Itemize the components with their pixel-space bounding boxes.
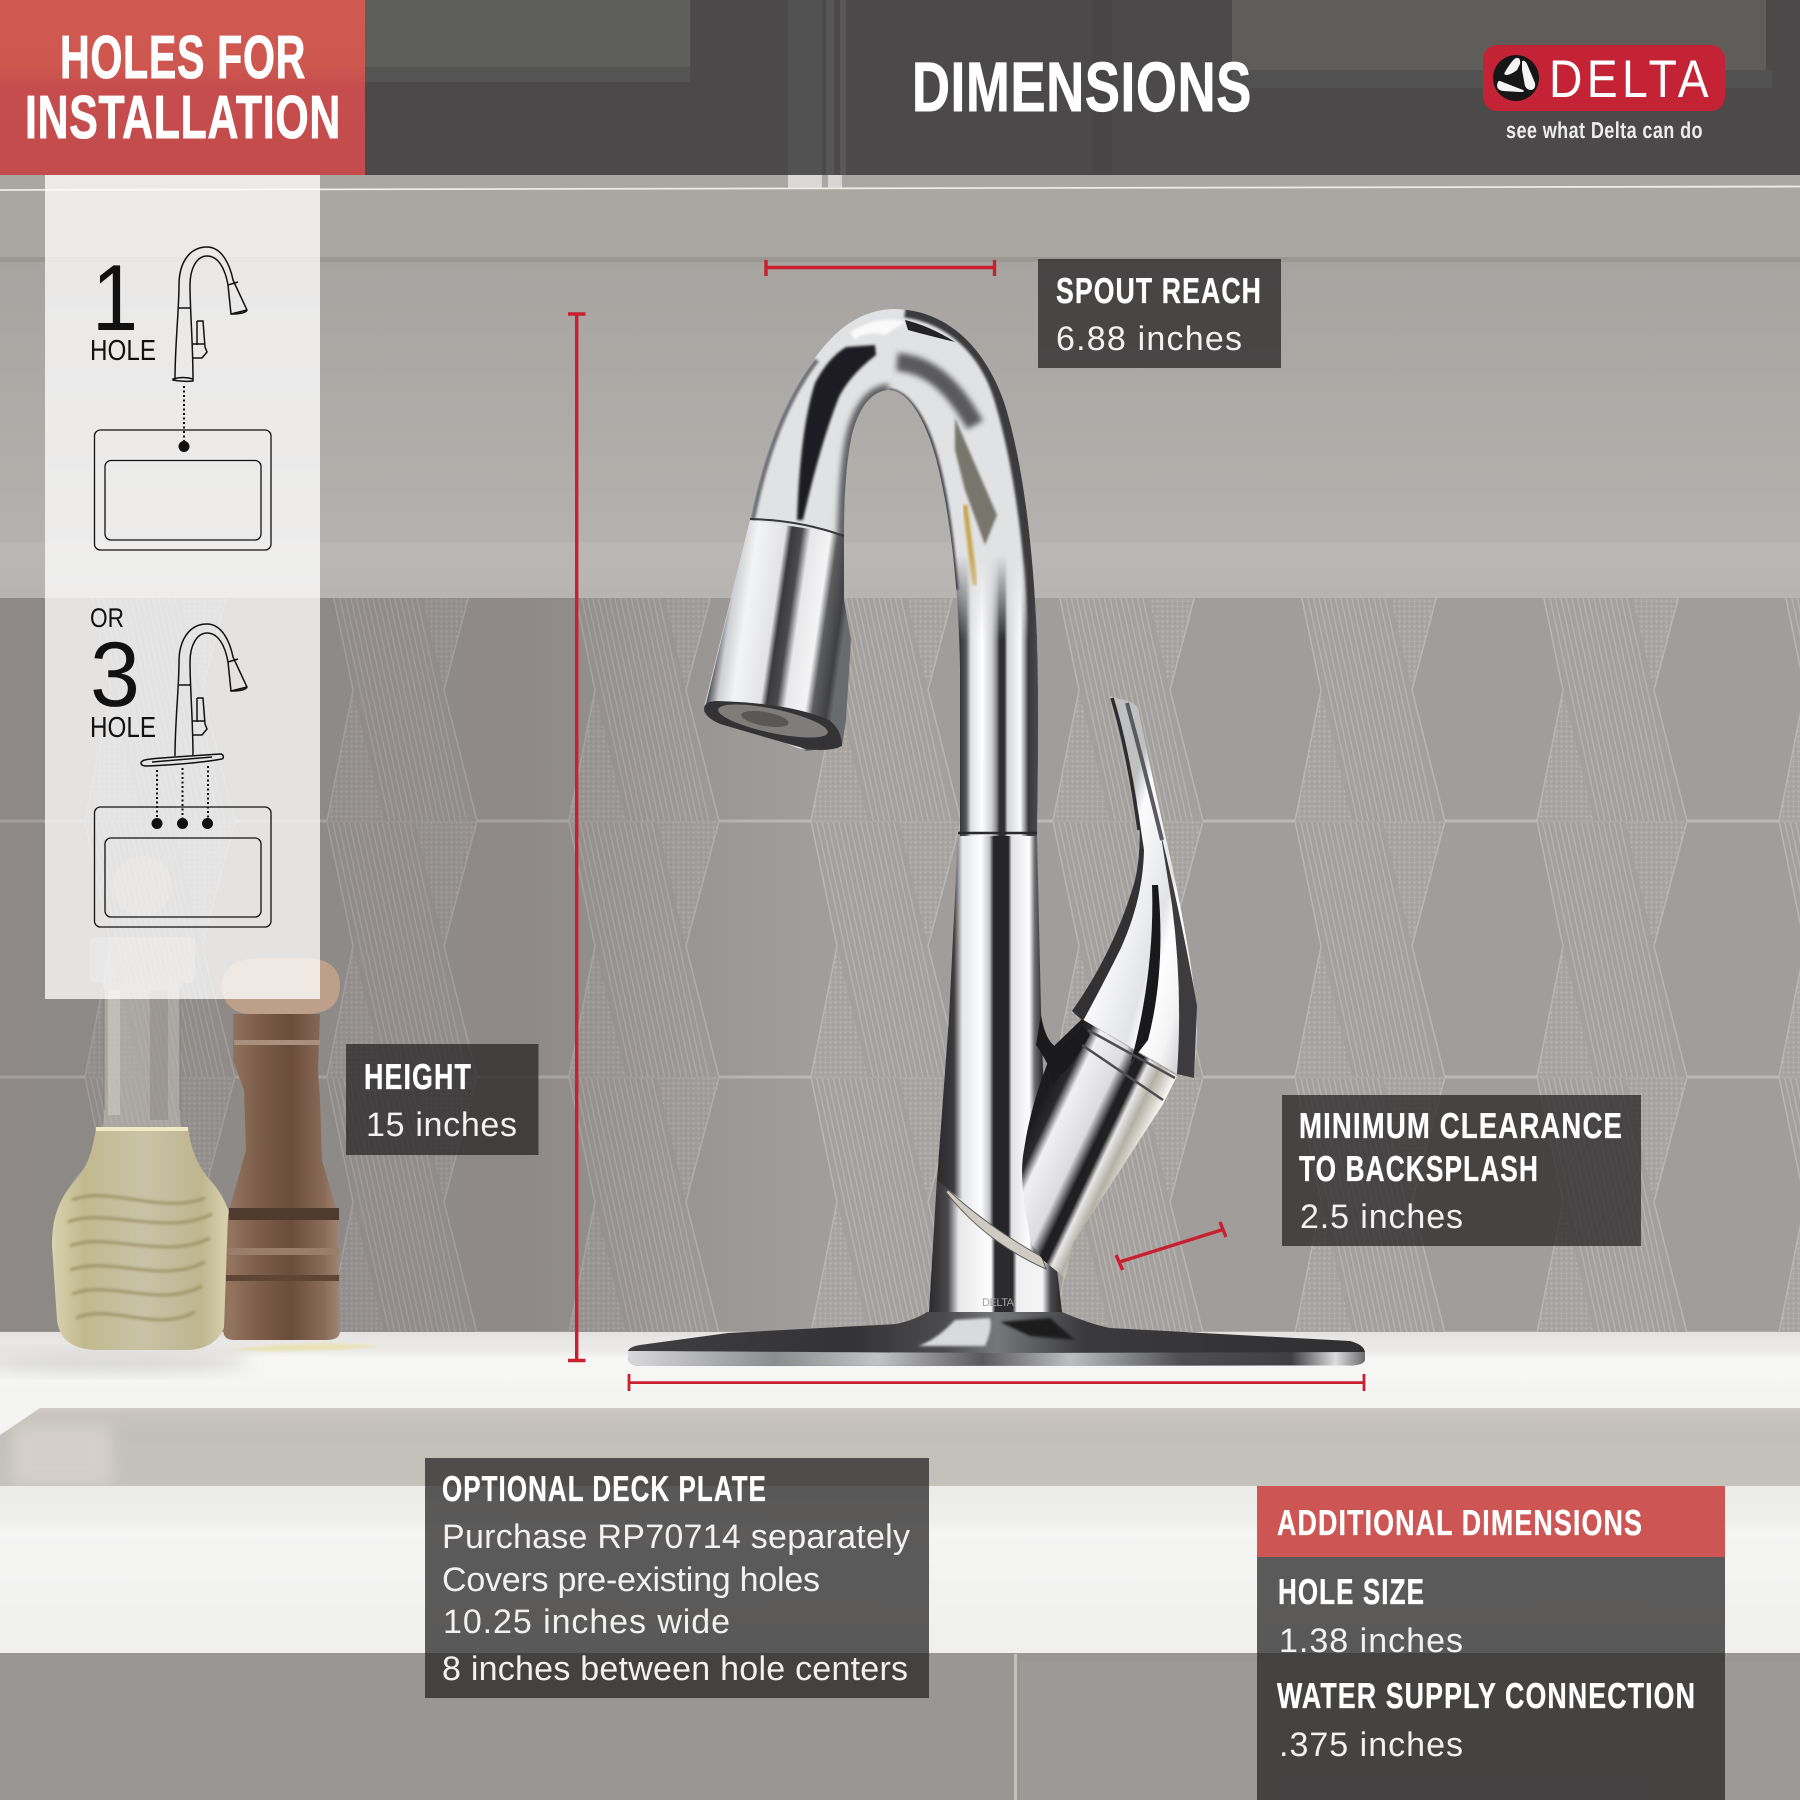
faucet lower base cylinder — [929, 1178, 1062, 1312]
callout: minimum clearance: TO BACKSPLASH — [1299, 1148, 1539, 1189]
three hole label: HOLE — [90, 712, 156, 744]
sink outline — [94, 807, 271, 927]
panel header: ADDITIONAL DIMENSIONS — [1277, 1502, 1643, 1543]
one hole label — [90, 245, 156, 367]
dimension line: backsplash clearance — [1116, 1222, 1226, 1270]
panel: holes for installation sidebar — [45, 175, 320, 999]
callout: optional deck plate — [425, 1458, 929, 1698]
callout: height: 15 inches — [366, 1106, 517, 1144]
callout: minimum clearance: 2.5 inches — [1300, 1198, 1463, 1236]
icon: one-hole faucet and sink — [90, 245, 271, 550]
inner left shading — [843, 390, 889, 540]
three hole label: OR — [90, 603, 124, 633]
panel: holes for installation header: HOLES FOR — [60, 23, 306, 91]
spray head — [704, 519, 851, 751]
hole size — [1278, 1571, 1463, 1660]
dotted connectors — [157, 766, 208, 818]
upper tube — [954, 559, 1038, 836]
callout: spout reach: SPOUT REACH — [1056, 270, 1262, 311]
gold streak — [965, 505, 975, 585]
faucet photo — [628, 309, 1365, 1366]
faucet outline with deck plate — [141, 624, 247, 766]
hole — [178, 441, 190, 452]
spout arc shading — [752, 312, 1034, 640]
handle collar rings — [1082, 1030, 1175, 1100]
callout: optional deck plate: OPTIONAL DECK PLATE — [442, 1468, 767, 1509]
aerator — [716, 698, 830, 744]
dimension line: deck plate width — [629, 1374, 1364, 1391]
faucet outline — [173, 247, 247, 381]
three hole label: 3 — [90, 624, 140, 726]
callout: minimum clearance: MINIMUM CLEARANCE — [1299, 1105, 1623, 1146]
callout: optional deck plate: 10.25 inches wide — [443, 1603, 730, 1641]
outer dark band — [905, 312, 1034, 640]
spout arc — [704, 309, 1038, 836]
dimension line: height — [568, 314, 586, 1360]
dimension line: spout reach — [766, 260, 994, 276]
lever dark fin — [1072, 810, 1144, 1021]
panel header — [1257, 1486, 1725, 1557]
lever tip lines — [1112, 698, 1139, 830]
black reflection — [797, 345, 876, 520]
sink outline — [94, 430, 271, 550]
holes — [152, 818, 213, 829]
counter and sink — [0, 1332, 1800, 1800]
faucet lower base cylinder: DELTA — [982, 1297, 1015, 1309]
dotted connector — [183, 386, 185, 441]
reflection patch — [955, 418, 997, 545]
handle lever — [1072, 696, 1197, 1078]
callout: height: HEIGHT — [364, 1056, 472, 1097]
lever centre reflection — [1131, 885, 1160, 1062]
callout: spout reach: 6.88 inches — [1056, 320, 1242, 358]
lever dark edge — [1160, 830, 1197, 1078]
callout: optional deck plate: Purchase RP70714 separately — [442, 1518, 910, 1556]
tagline: see what Delta can do — [1506, 117, 1703, 143]
top highlight — [850, 320, 905, 340]
oil bottle — [52, 856, 233, 1350]
three hole label — [90, 603, 156, 744]
callout: optional deck plate: Covers pre-existing holes — [442, 1561, 820, 1599]
icon: delta emblem — [1493, 55, 1539, 101]
pepper mill — [222, 958, 340, 1340]
logo: Delta: DELTA — [1549, 50, 1713, 109]
hole size: HOLE SIZE — [1278, 1571, 1425, 1612]
callout: optional deck plate: 8 inches between hole centers — [442, 1650, 908, 1688]
title: DIMENSIONS — [912, 48, 1252, 126]
one hole label: 1 — [92, 245, 138, 350]
faucet column — [937, 836, 1050, 1260]
callout: height — [346, 1044, 538, 1155]
panel: holes for installation header: INSTALLATION — [25, 83, 341, 151]
crotch shadow — [1036, 1015, 1090, 1085]
callout: minimum clearance — [1282, 1095, 1641, 1246]
inner grey band — [897, 362, 975, 425]
tiled backsplash — [0, 598, 1800, 1333]
icon: three-hole faucet and sink — [90, 603, 271, 927]
left edge shading — [752, 360, 817, 522]
one hole label: HOLE — [90, 335, 156, 367]
water supply connection: .375 inches — [1279, 1726, 1463, 1764]
panel: holes for installation header — [0, 0, 365, 175]
panel: additional dimensions — [1257, 1486, 1725, 1800]
deck plate — [628, 1312, 1365, 1366]
logo: Delta — [1483, 45, 1725, 143]
callout: spout reach — [1038, 259, 1281, 368]
hole size: 1.38 inches — [1279, 1622, 1463, 1660]
swoosh band — [946, 1190, 1046, 1269]
water supply connection — [1277, 1675, 1696, 1764]
upper cabinet band — [0, 0, 1800, 175]
shelf molding and wall — [0, 175, 1800, 598]
handle sleeve — [1022, 1019, 1177, 1278]
